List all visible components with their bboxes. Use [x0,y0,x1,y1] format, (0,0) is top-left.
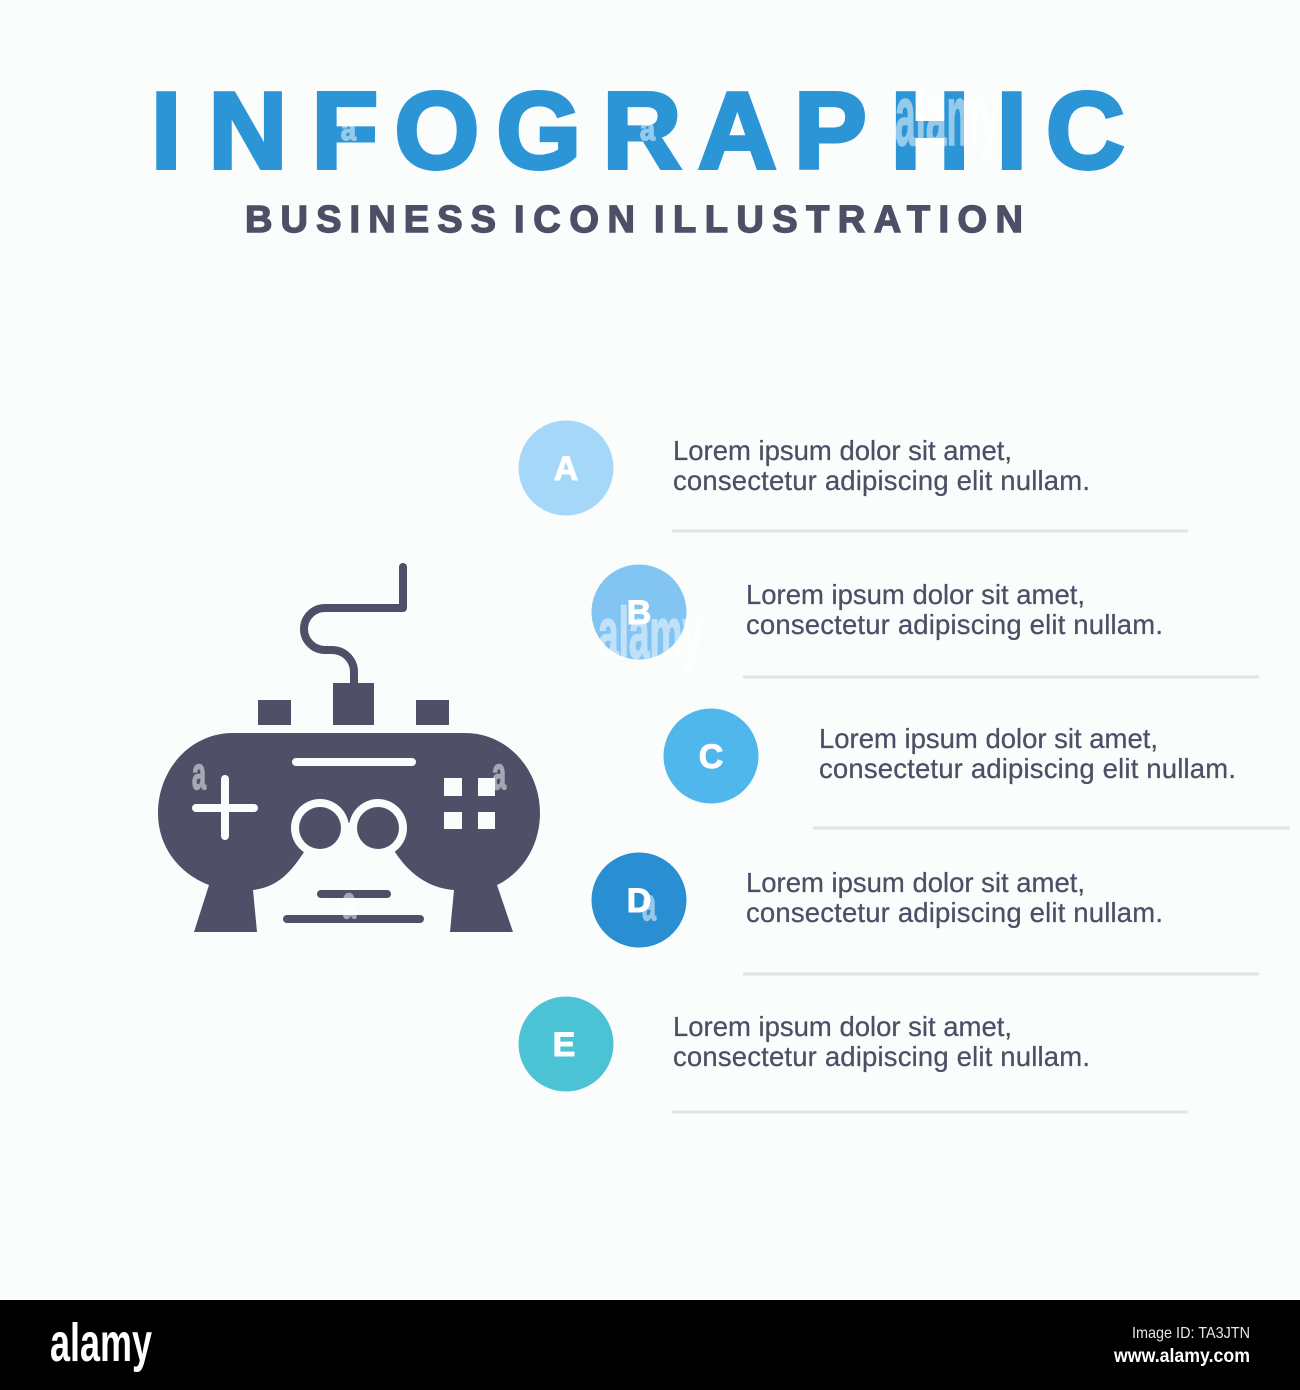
badge A [518,420,614,516]
rule B [743,676,1259,678]
watermarks: a [640,111,655,147]
item B [592,564,1259,677]
top buttons [258,683,449,725]
subtitle word 3: ILLUSTRATION [654,199,1023,241]
joysticks [299,807,399,849]
text D line 2: consectetur adipiscing elit nullam. [746,897,1163,928]
rule E [672,1110,1188,1114]
letter C: C [699,738,723,776]
text C line 2: consectetur adipiscing elit nullam. [819,753,1236,784]
watermarks [192,69,1000,930]
item A [518,420,1188,531]
footer bar [0,1300,1300,1390]
letter A: A [554,450,578,488]
badge D [592,852,686,948]
watermarks: a [341,111,356,147]
icon: game controller [158,567,540,932]
joystick rings [291,799,407,857]
text C: Lorem ipsum dolor sit amet, [819,723,1158,754]
text D: Lorem ipsum dolor sit amet, [746,867,1085,898]
text E line 2: consectetur adipiscing elit nullam. [673,1041,1090,1072]
title: INFOGRAPHIC [151,70,1125,192]
text B: Lorem ipsum dolor sit amet, [746,579,1085,610]
watermarks: a [642,879,657,930]
item C [664,708,1290,828]
subtitle word 2: ICON [514,199,635,241]
badge E [518,996,614,1092]
watermarks: a [192,748,207,799]
rule D [743,972,1259,976]
image id: Image ID: TA3JTN [1132,1325,1250,1342]
controller body [158,733,540,932]
footer logo: alamy [50,1313,152,1373]
text A: Lorem ipsum dolor sit amet, [673,435,1012,466]
letter E: E [553,1026,575,1064]
website: www.alamy.com [1113,1346,1250,1367]
letter D: D [627,882,651,920]
text B line 2: consectetur adipiscing elit nullam. [746,609,1163,640]
text E: Lorem ipsum dolor sit amet, [673,1011,1012,1042]
text: alamy [895,69,1000,164]
watermarks: a [492,748,507,799]
action buttons [444,778,495,829]
badge B [592,564,686,660]
text A line 2: consectetur adipiscing elit nullam. [673,465,1090,496]
subtitle [245,199,1023,241]
watermarks: a [342,877,357,928]
cross pad, top slot [196,762,412,836]
item D [592,852,1259,974]
rule A [672,530,1188,532]
controller cable [304,567,403,686]
subtitle word 1: BUSINESS [245,199,496,241]
rule C [813,826,1290,830]
lower lines [287,894,420,919]
badge C [664,708,758,804]
letter B: B [627,594,651,632]
watermarks: alamy [598,594,703,674]
item E [518,996,1188,1112]
